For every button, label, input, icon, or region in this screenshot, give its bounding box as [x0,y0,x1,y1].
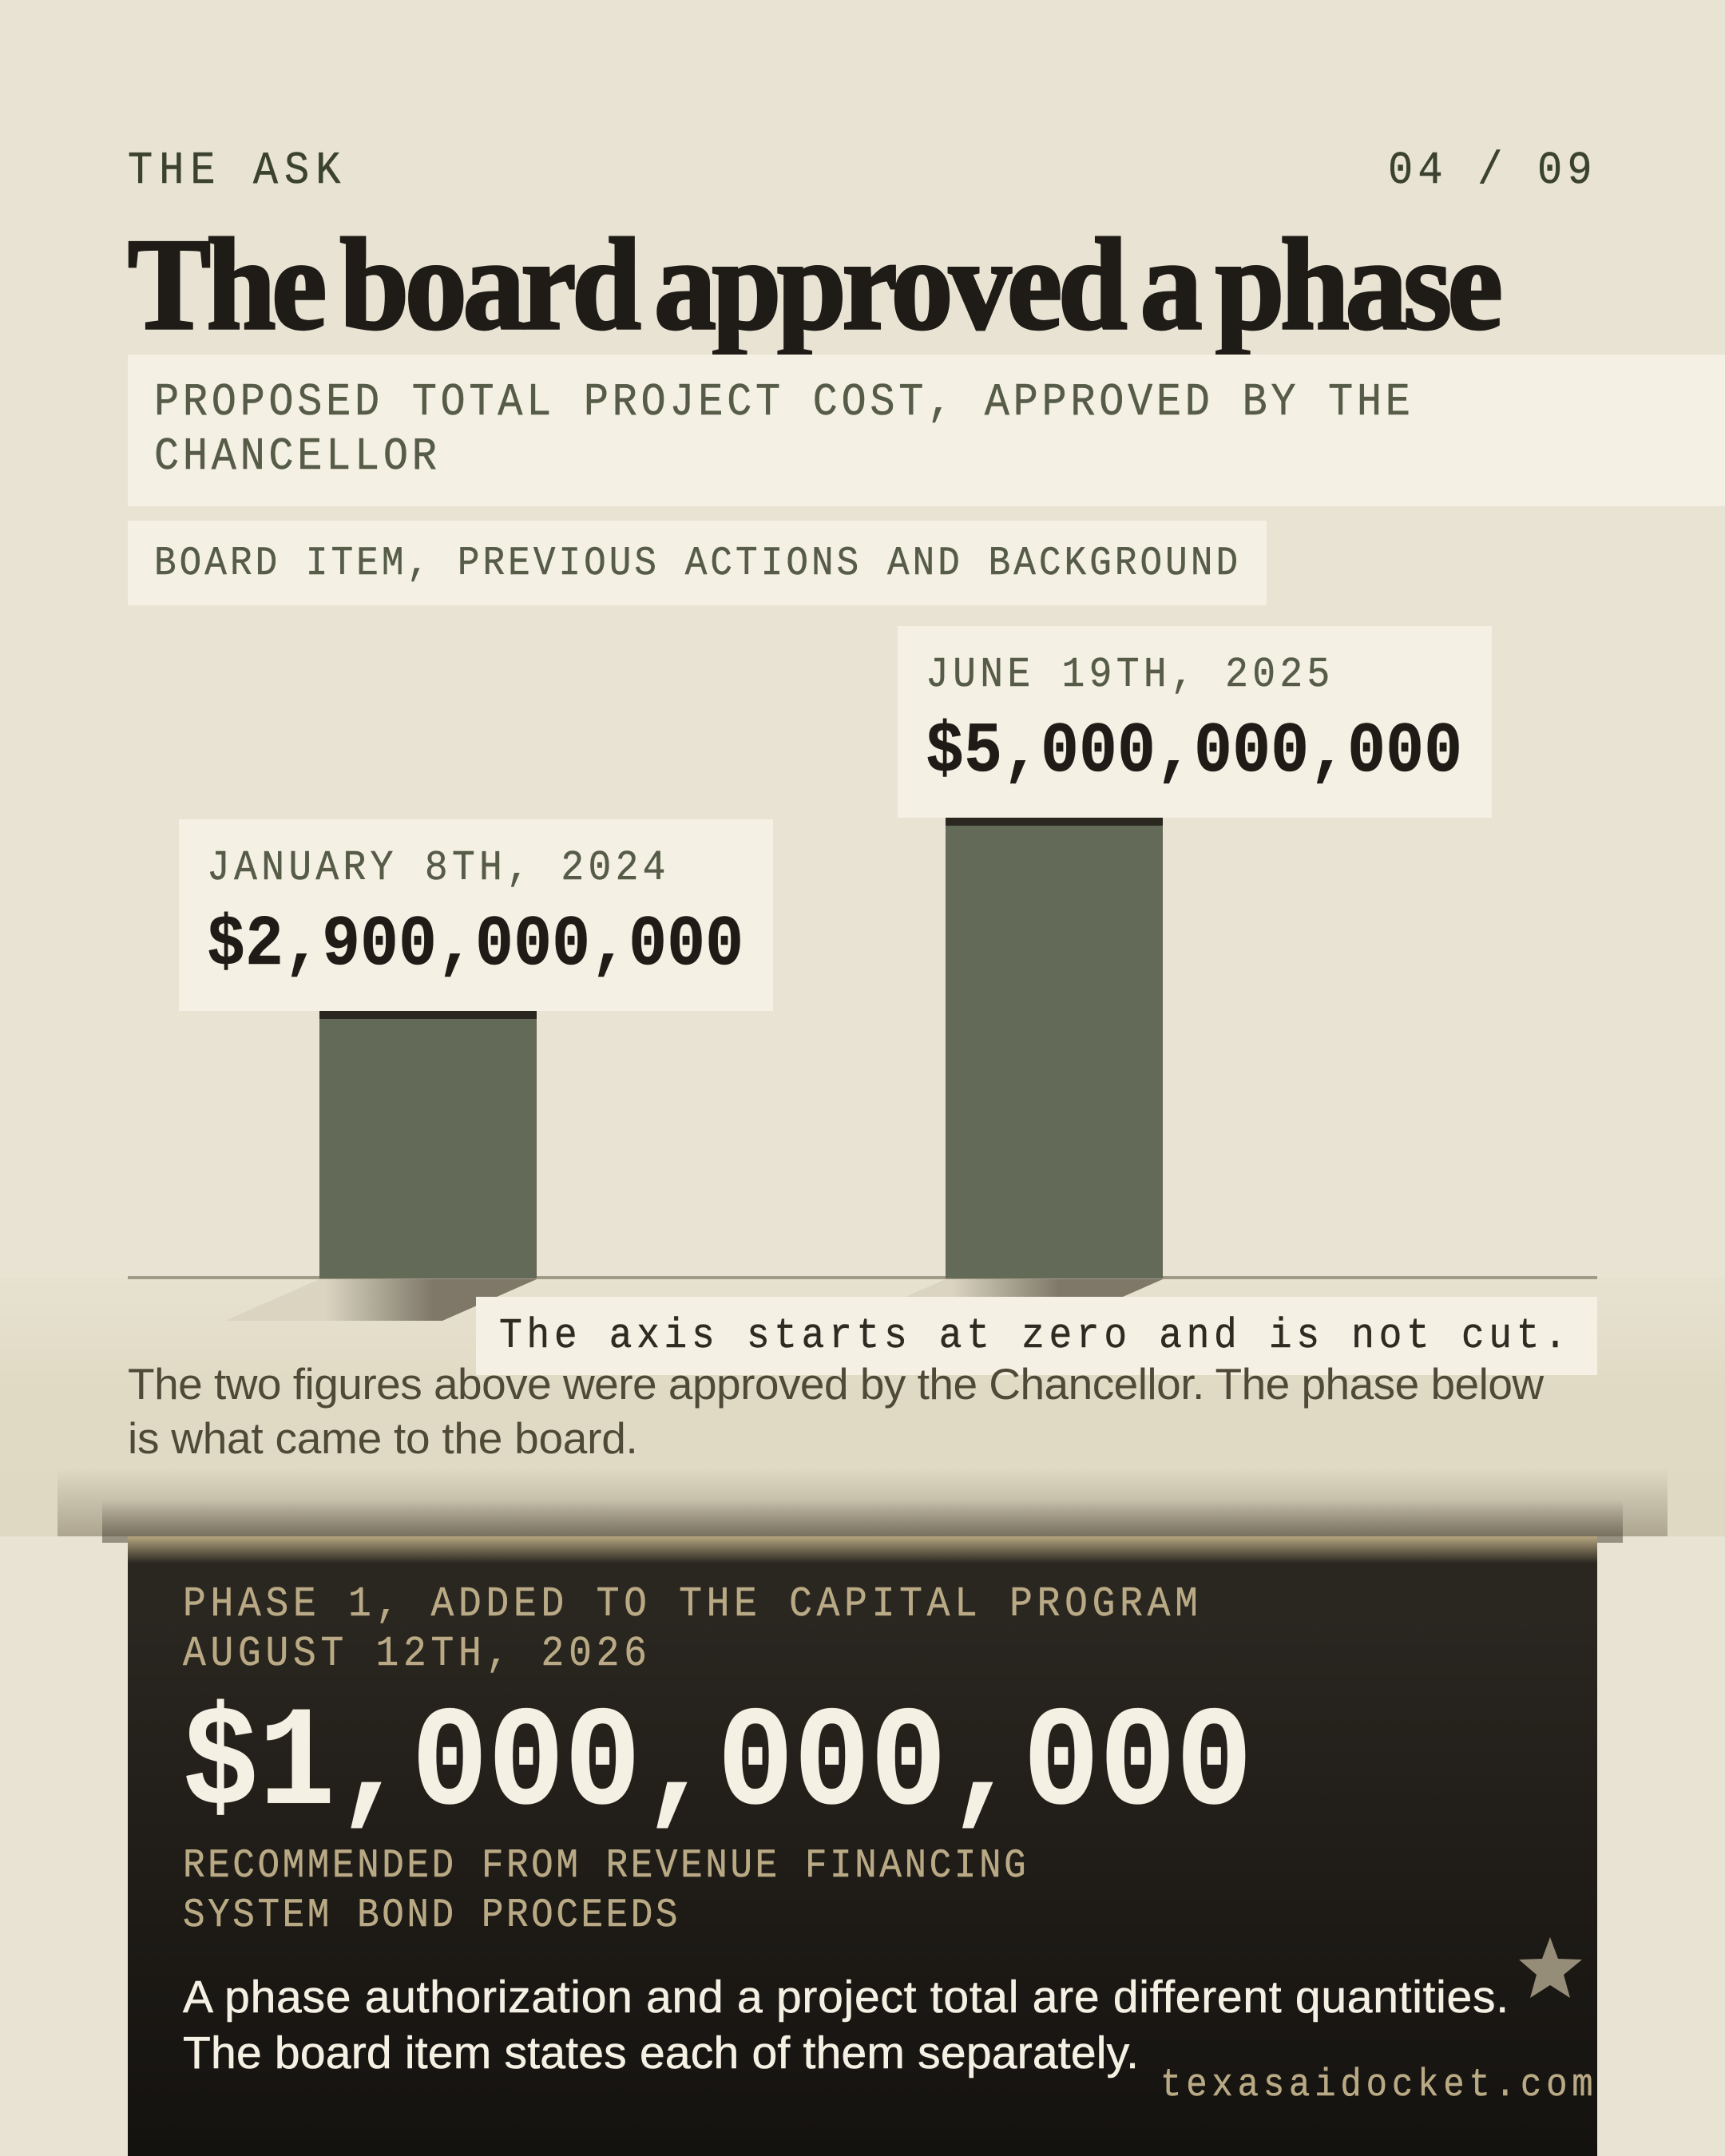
value card: June 2025 [898,626,1492,818]
page counter: 04 / 09 [1388,145,1597,197]
floor band behind the lower section [0,1278,1725,1536]
panel: phase 1 [128,1536,1597,2156]
subtitle panel [128,355,1725,506]
funding source line 2: SYSTEM BOND PROCEEDS [183,1892,680,1938]
axis note [476,1297,1597,1375]
date: JUNE 19TH, 2025 [926,652,1334,700]
outer shadow band above the dark panel [58,1468,1668,1536]
site url: texasaidocket.com [1160,2063,1597,2108]
date: JANUARY 8TH, 2024 [207,845,670,893]
eyebrow label: THE ASK [128,145,347,197]
bar: June 2025 [946,818,1163,1278]
icon: star [1519,1937,1582,1998]
amount: $2,900,000,000 [207,905,744,985]
panel top glow [128,1536,1597,1563]
value card: January 2024 [179,819,773,1011]
source label text: BOARD ITEM, PREVIOUS ACTIONS AND BACKGROUND [154,541,1241,586]
bar: January 2024 [319,1011,537,1278]
amount: $5,000,000,000 [926,711,1462,792]
title: The board approved a phase [128,212,1499,357]
source label panel [128,521,1267,605]
subtitle text line 2: CHANCELLOR [154,430,441,483]
inner shadow band above the dark panel [102,1500,1623,1543]
bar: January 2024 shadow [226,1279,537,1321]
phase amount: $1,000,000,000 [182,1686,1252,1847]
axis line [128,1276,1597,1279]
phase label: PHASE 1, ADDED TO THE CAPITAL PROGRAM [183,1581,1203,1629]
body paragraph: The two figures above were approved by the Chancellor. The phase below is what came to the board. [128,1359,1544,1463]
axis note text: The axis starts at zero and is not cut. [499,1313,1572,1361]
bar: June 2025 shadow [906,1279,1163,1297]
closing statement: A phase authorization and a project total are different quantities. The board item states each of them separately. [183,1972,1509,2079]
phase date: AUGUST 12TH, 2026 [183,1631,652,1678]
subtitle text line 1: PROPOSED TOTAL PROJECT COST, APPROVED BY THE [154,376,1414,429]
bar chart [128,626,1597,1321]
funding source: RECOMMENDED FROM REVENUE FINANCING [183,1843,1029,1888]
